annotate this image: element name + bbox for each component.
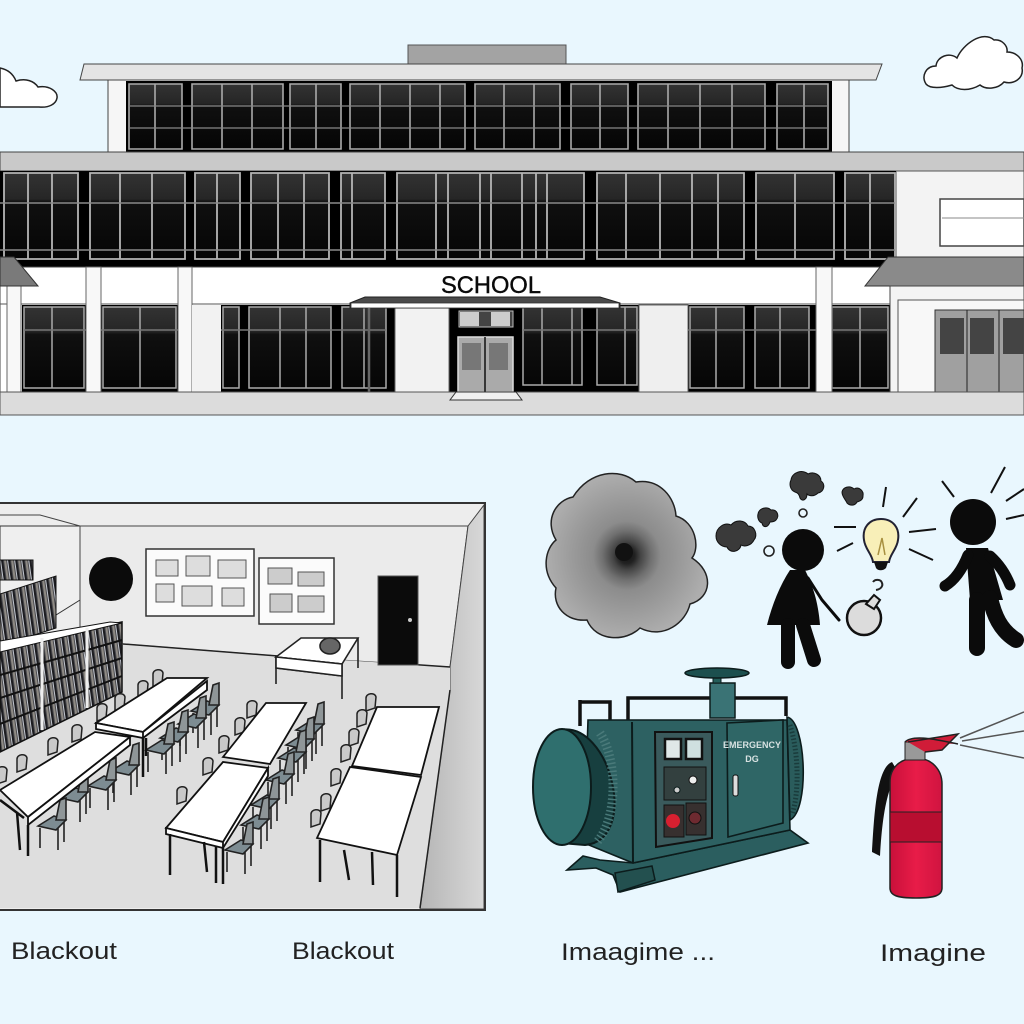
chairs in front of tables — [38, 683, 324, 874]
icon: fire extinguisher — [872, 734, 958, 898]
ground floor wall — [0, 267, 896, 392]
teacher desk — [276, 638, 358, 699]
generator label: EMERGENCY — [723, 740, 782, 751]
entrance doors — [450, 311, 522, 400]
thought bubbles — [764, 509, 807, 556]
rays — [942, 467, 1024, 519]
rays — [834, 487, 936, 560]
caption: Imagine ...: Imaagime ... — [561, 939, 715, 966]
title: SCHOOL: SCHOOL — [441, 272, 541, 299]
school building — [0, 37, 1024, 415]
upper roof — [80, 64, 882, 80]
spray lines — [960, 712, 1024, 758]
sign panel right — [940, 199, 1024, 246]
side canopy left — [0, 257, 38, 286]
notice board 2 — [259, 558, 334, 624]
caption: Blackout 1: Blackout — [11, 938, 117, 965]
notice board 1 — [146, 549, 254, 616]
ground floor windows — [24, 307, 888, 388]
stick figures and idea — [716, 467, 1024, 662]
icon: cloud right — [924, 37, 1022, 90]
icon: cloud left — [0, 68, 57, 107]
room walls — [0, 503, 485, 910]
smoke puffs — [716, 472, 863, 551]
floor — [0, 644, 450, 908]
generator sub label: DG — [745, 754, 759, 764]
caption: Blackout 2: Blackout — [292, 938, 394, 965]
icon: light bulb — [864, 519, 898, 570]
columns — [7, 267, 832, 395]
icon: generator — [533, 668, 808, 892]
caption: Imagine: Imagine — [880, 940, 986, 967]
second storey windows — [0, 171, 896, 267]
bookshelves — [0, 560, 122, 752]
middle roof band — [0, 152, 1024, 171]
icon: hanging bulb — [847, 580, 882, 635]
pavement — [0, 392, 1024, 415]
figure right — [945, 499, 1016, 648]
door — [378, 576, 418, 665]
second storey right block — [896, 171, 1024, 391]
side building right — [865, 257, 1024, 392]
figure left — [767, 529, 839, 662]
panel: classroom — [0, 503, 485, 910]
roof cap — [408, 45, 566, 64]
upper storey — [108, 80, 849, 152]
wall clock — [89, 557, 133, 601]
ground floor black surround — [22, 305, 890, 392]
student tables — [0, 678, 439, 897]
entrance canopy — [350, 297, 620, 402]
icon: smoke cloud — [546, 473, 708, 638]
entrance step and pole base — [450, 392, 522, 400]
chairs behind tables — [0, 670, 376, 827]
